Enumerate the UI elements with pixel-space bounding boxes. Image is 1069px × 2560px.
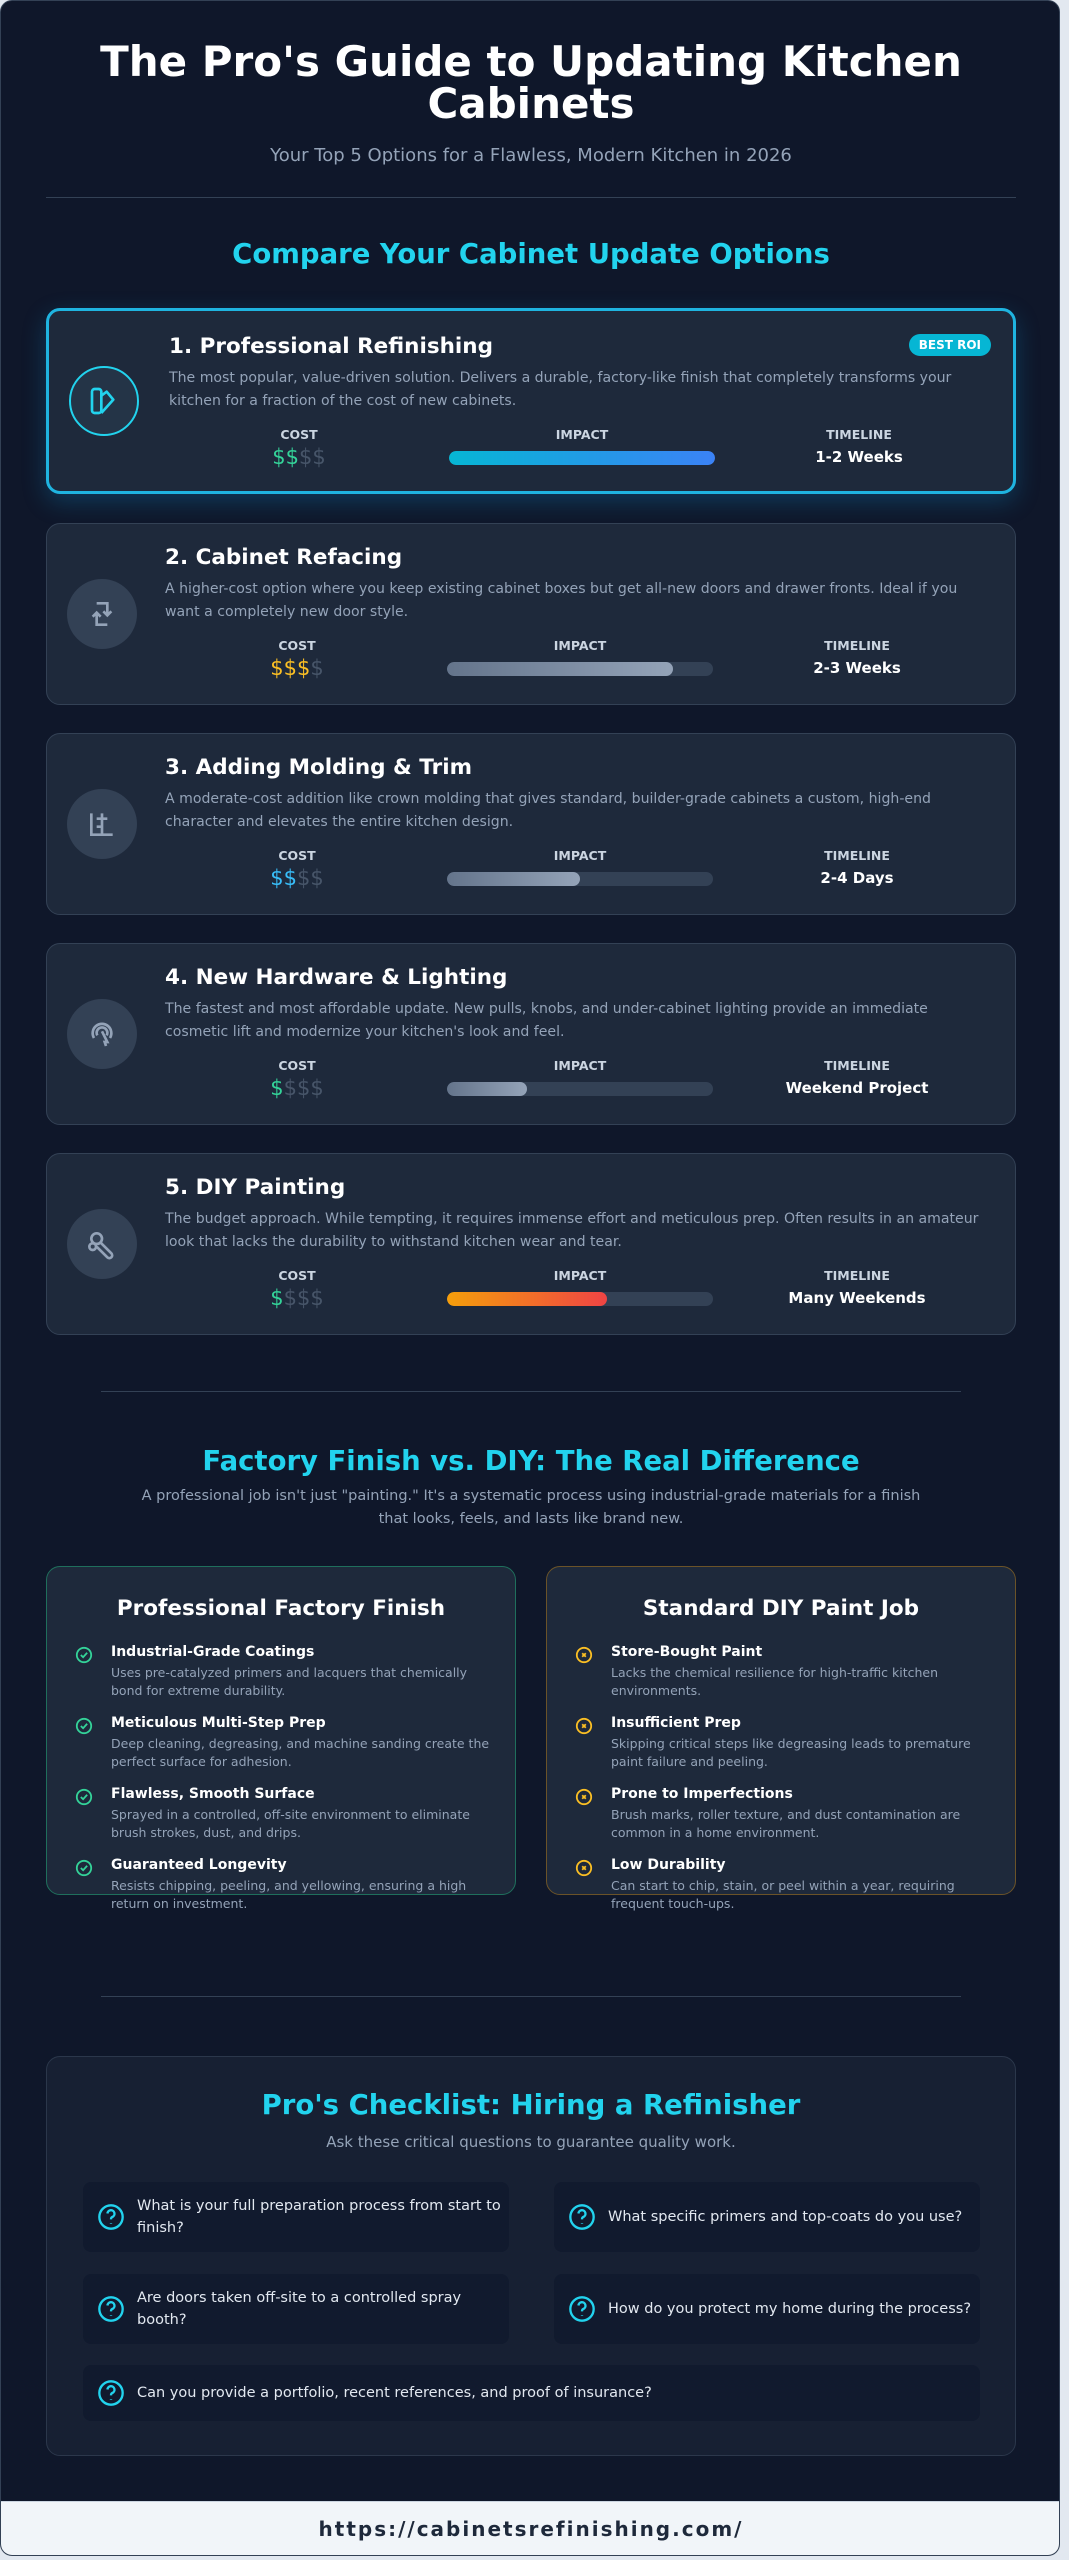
card 5: DIY: $$$$ bbox=[270, 1286, 324, 1310]
question 2: What specific primers and top-coats do you use? bbox=[608, 2209, 962, 2225]
question 3: Are doors taken off-site to a controlled spray booth? bbox=[137, 2290, 461, 2328]
heading: Pro's Checklist: Hiring a Refinisher bbox=[262, 2089, 800, 2121]
question 5 bbox=[83, 2365, 980, 2421]
card 4: hardware bbox=[46, 943, 1016, 1125]
description: The most popular, value-driven solution. Delivers a durable, factory-like finish that completely transforms your kitchen for a fraction of the cost of new cabinets. bbox=[169, 370, 951, 409]
card 4: hardware: COST bbox=[278, 1058, 316, 1073]
item bbox=[76, 1786, 470, 1840]
panel: diy bbox=[546, 1566, 1016, 1895]
card 4: hardware: Weekend Project bbox=[786, 1079, 928, 1097]
question 2 bbox=[554, 2182, 980, 2252]
item bbox=[76, 1715, 489, 1769]
heading: 3. Adding Molding & Trim bbox=[165, 755, 472, 780]
title: Cabinets bbox=[427, 79, 635, 128]
item bbox=[76, 1857, 466, 1911]
item bbox=[76, 1644, 467, 1698]
icon: swatch bbox=[69, 366, 139, 436]
question 3 bbox=[83, 2274, 509, 2344]
card 5: DIY: TIMELINE bbox=[824, 1268, 890, 1283]
description: The fastest and most affordable update. New pulls, knobs, and under-cabinet lighting provide an immediate cosmetic lift and modernize your kitchen's look and feel. bbox=[165, 1001, 928, 1040]
panel: diy: Prone to Imperfections bbox=[611, 1786, 793, 1802]
card 5: DIY: COST bbox=[278, 1268, 316, 1283]
description: A moderate-cost addition like crown molding that gives standard, builder-grade cabinets a custom, high-end character and elevates the entire kitchen design. bbox=[165, 791, 931, 830]
card 3: molding: TIMELINE bbox=[824, 848, 890, 863]
card 1: professional refinishing: $$$$ bbox=[272, 445, 326, 469]
footer bbox=[1, 2501, 1061, 2557]
section heading: compare: Compare Your Cabinet Update Options bbox=[232, 238, 830, 270]
question 1 bbox=[83, 2182, 509, 2252]
panel: professional: Flawless, Smooth Surface bbox=[111, 1786, 315, 1802]
panel: professional bbox=[46, 1566, 516, 1895]
heading: Professional Factory Finish bbox=[117, 1596, 445, 1621]
panel: diy: Lacks the chemical resilience for high-traffic kitchen environments. bbox=[611, 1665, 938, 1698]
panel: checklist bbox=[46, 2056, 1016, 2456]
title: The Pro's Guide to Updating Kitchen bbox=[100, 37, 962, 86]
heading: 1. Professional Refinishing bbox=[169, 334, 493, 359]
heading: 5. DIY Painting bbox=[165, 1175, 345, 1200]
panel: diy: Store-Bought Paint bbox=[611, 1644, 762, 1660]
description: The budget approach. While tempting, it requires immense effort and meticulous prep. Often results in an amateur look that lacks the durability to withstand kitchen wear and tear. bbox=[165, 1211, 978, 1250]
card 5: DIY: Many Weekends bbox=[788, 1289, 926, 1307]
card 1: professional refinishing: IMPACT bbox=[556, 427, 608, 442]
card 3: molding: IMPACT bbox=[554, 848, 606, 863]
section intro: A professional job isn't just "painting." It's a systematic process using industrial-grade materials for a finish that looks, feels, and lasts like brand new. bbox=[142, 1488, 920, 1527]
card 4: hardware: TIMELINE bbox=[824, 1058, 890, 1073]
card 2: refacing: TIMELINE bbox=[824, 638, 890, 653]
stats bbox=[270, 638, 901, 680]
card 1: professional refinishing: COST bbox=[280, 427, 318, 442]
card 4: hardware: $$$$ bbox=[270, 1076, 324, 1100]
panel: diy: Brush marks, roller texture, and dust contamination are common in a home environment. bbox=[611, 1807, 960, 1840]
heading: 2. Cabinet Refacing bbox=[165, 545, 402, 570]
subtitle: Your Top 5 Options for a Flawless, Modern Kitchen in 2026 bbox=[270, 145, 792, 166]
stats bbox=[272, 427, 903, 469]
card 3: molding: COST bbox=[278, 848, 316, 863]
heading: Standard DIY Paint Job bbox=[643, 1596, 919, 1621]
panel: diy: Insufficient Prep bbox=[611, 1715, 741, 1731]
question 1: What is your full preparation process from start to finish? bbox=[137, 2198, 501, 2236]
icon: swap bbox=[67, 579, 137, 649]
card 1: professional refinishing: TIMELINE bbox=[826, 427, 892, 442]
card 4: hardware: IMPACT bbox=[554, 1058, 606, 1073]
card 2: refacing: COST bbox=[278, 638, 316, 653]
badge bbox=[909, 334, 991, 356]
card 5: DIY: IMPACT bbox=[554, 1268, 606, 1283]
stats bbox=[270, 1058, 928, 1100]
card 2: refacing bbox=[46, 523, 1016, 705]
card 3: molding bbox=[46, 733, 1016, 915]
panel: professional: Meticulous Multi-Step Prep bbox=[111, 1715, 326, 1731]
card 1: professional refinishing: 1-2 Weeks bbox=[815, 448, 903, 466]
question 4: How do you protect my home during the process? bbox=[608, 2301, 971, 2317]
icon: brush bbox=[67, 1209, 137, 1279]
panel: diy: Skipping critical steps like degreasing leads to premature paint failure and peeling. bbox=[611, 1736, 971, 1769]
item bbox=[576, 1857, 955, 1911]
card 1: professional refinishing bbox=[46, 308, 1016, 494]
item bbox=[576, 1644, 938, 1698]
item bbox=[576, 1786, 960, 1840]
badge: BEST ROI bbox=[919, 338, 981, 352]
panel: professional: Resists chipping, peeling, and yellowing, ensuring a high return on investment. bbox=[111, 1878, 466, 1911]
icon: ruler bbox=[67, 789, 137, 859]
panel: professional: Sprayed in a controlled, off-site environment to eliminate brush strokes, dust, and drips. bbox=[111, 1807, 470, 1840]
card 3: molding: $$$$ bbox=[270, 866, 324, 890]
card 3: molding: 2-4 Days bbox=[820, 869, 894, 887]
question 5: Can you provide a portfolio, recent references, and proof of insurance? bbox=[137, 2385, 652, 2401]
card 2: refacing: IMPACT bbox=[554, 638, 606, 653]
question 4 bbox=[554, 2274, 980, 2344]
stats bbox=[270, 1268, 926, 1310]
panel: diy: Can start to chip, stain, or peel within a year, requiring frequent touch-ups. bbox=[611, 1878, 955, 1911]
footer: https://cabinetsrefinishing.com/ bbox=[319, 2517, 743, 2541]
panel: professional: Deep cleaning, degreasing, and machine sanding create the perfect surface for adhesion. bbox=[111, 1736, 489, 1769]
item bbox=[576, 1715, 971, 1769]
panel: professional: Uses pre-catalyzed primers and lacquers that chemically bond for extreme durability. bbox=[111, 1665, 467, 1698]
card 5: DIY bbox=[46, 1153, 1016, 1335]
card 2: refacing: $$$$ bbox=[270, 656, 324, 680]
panel: diy: Low Durability bbox=[611, 1857, 726, 1873]
stats bbox=[270, 848, 894, 890]
panel: professional: Industrial-Grade Coatings bbox=[111, 1644, 314, 1660]
description: A higher-cost option where you keep existing cabinet boxes but get all-new doors and drawer fronts. Ideal if you want a completely new door style. bbox=[165, 581, 957, 620]
title bbox=[100, 37, 962, 128]
section heading: factory vs diy: Factory Finish vs. DIY: The Real Difference bbox=[202, 1445, 860, 1477]
subtitle: Ask these critical questions to guarantee quality work. bbox=[326, 2133, 736, 2151]
panel: professional: Guaranteed Longevity bbox=[111, 1857, 287, 1873]
card 2: refacing: 2-3 Weeks bbox=[813, 659, 901, 677]
icon: pointer bbox=[67, 999, 137, 1069]
heading: 4. New Hardware & Lighting bbox=[165, 965, 507, 990]
